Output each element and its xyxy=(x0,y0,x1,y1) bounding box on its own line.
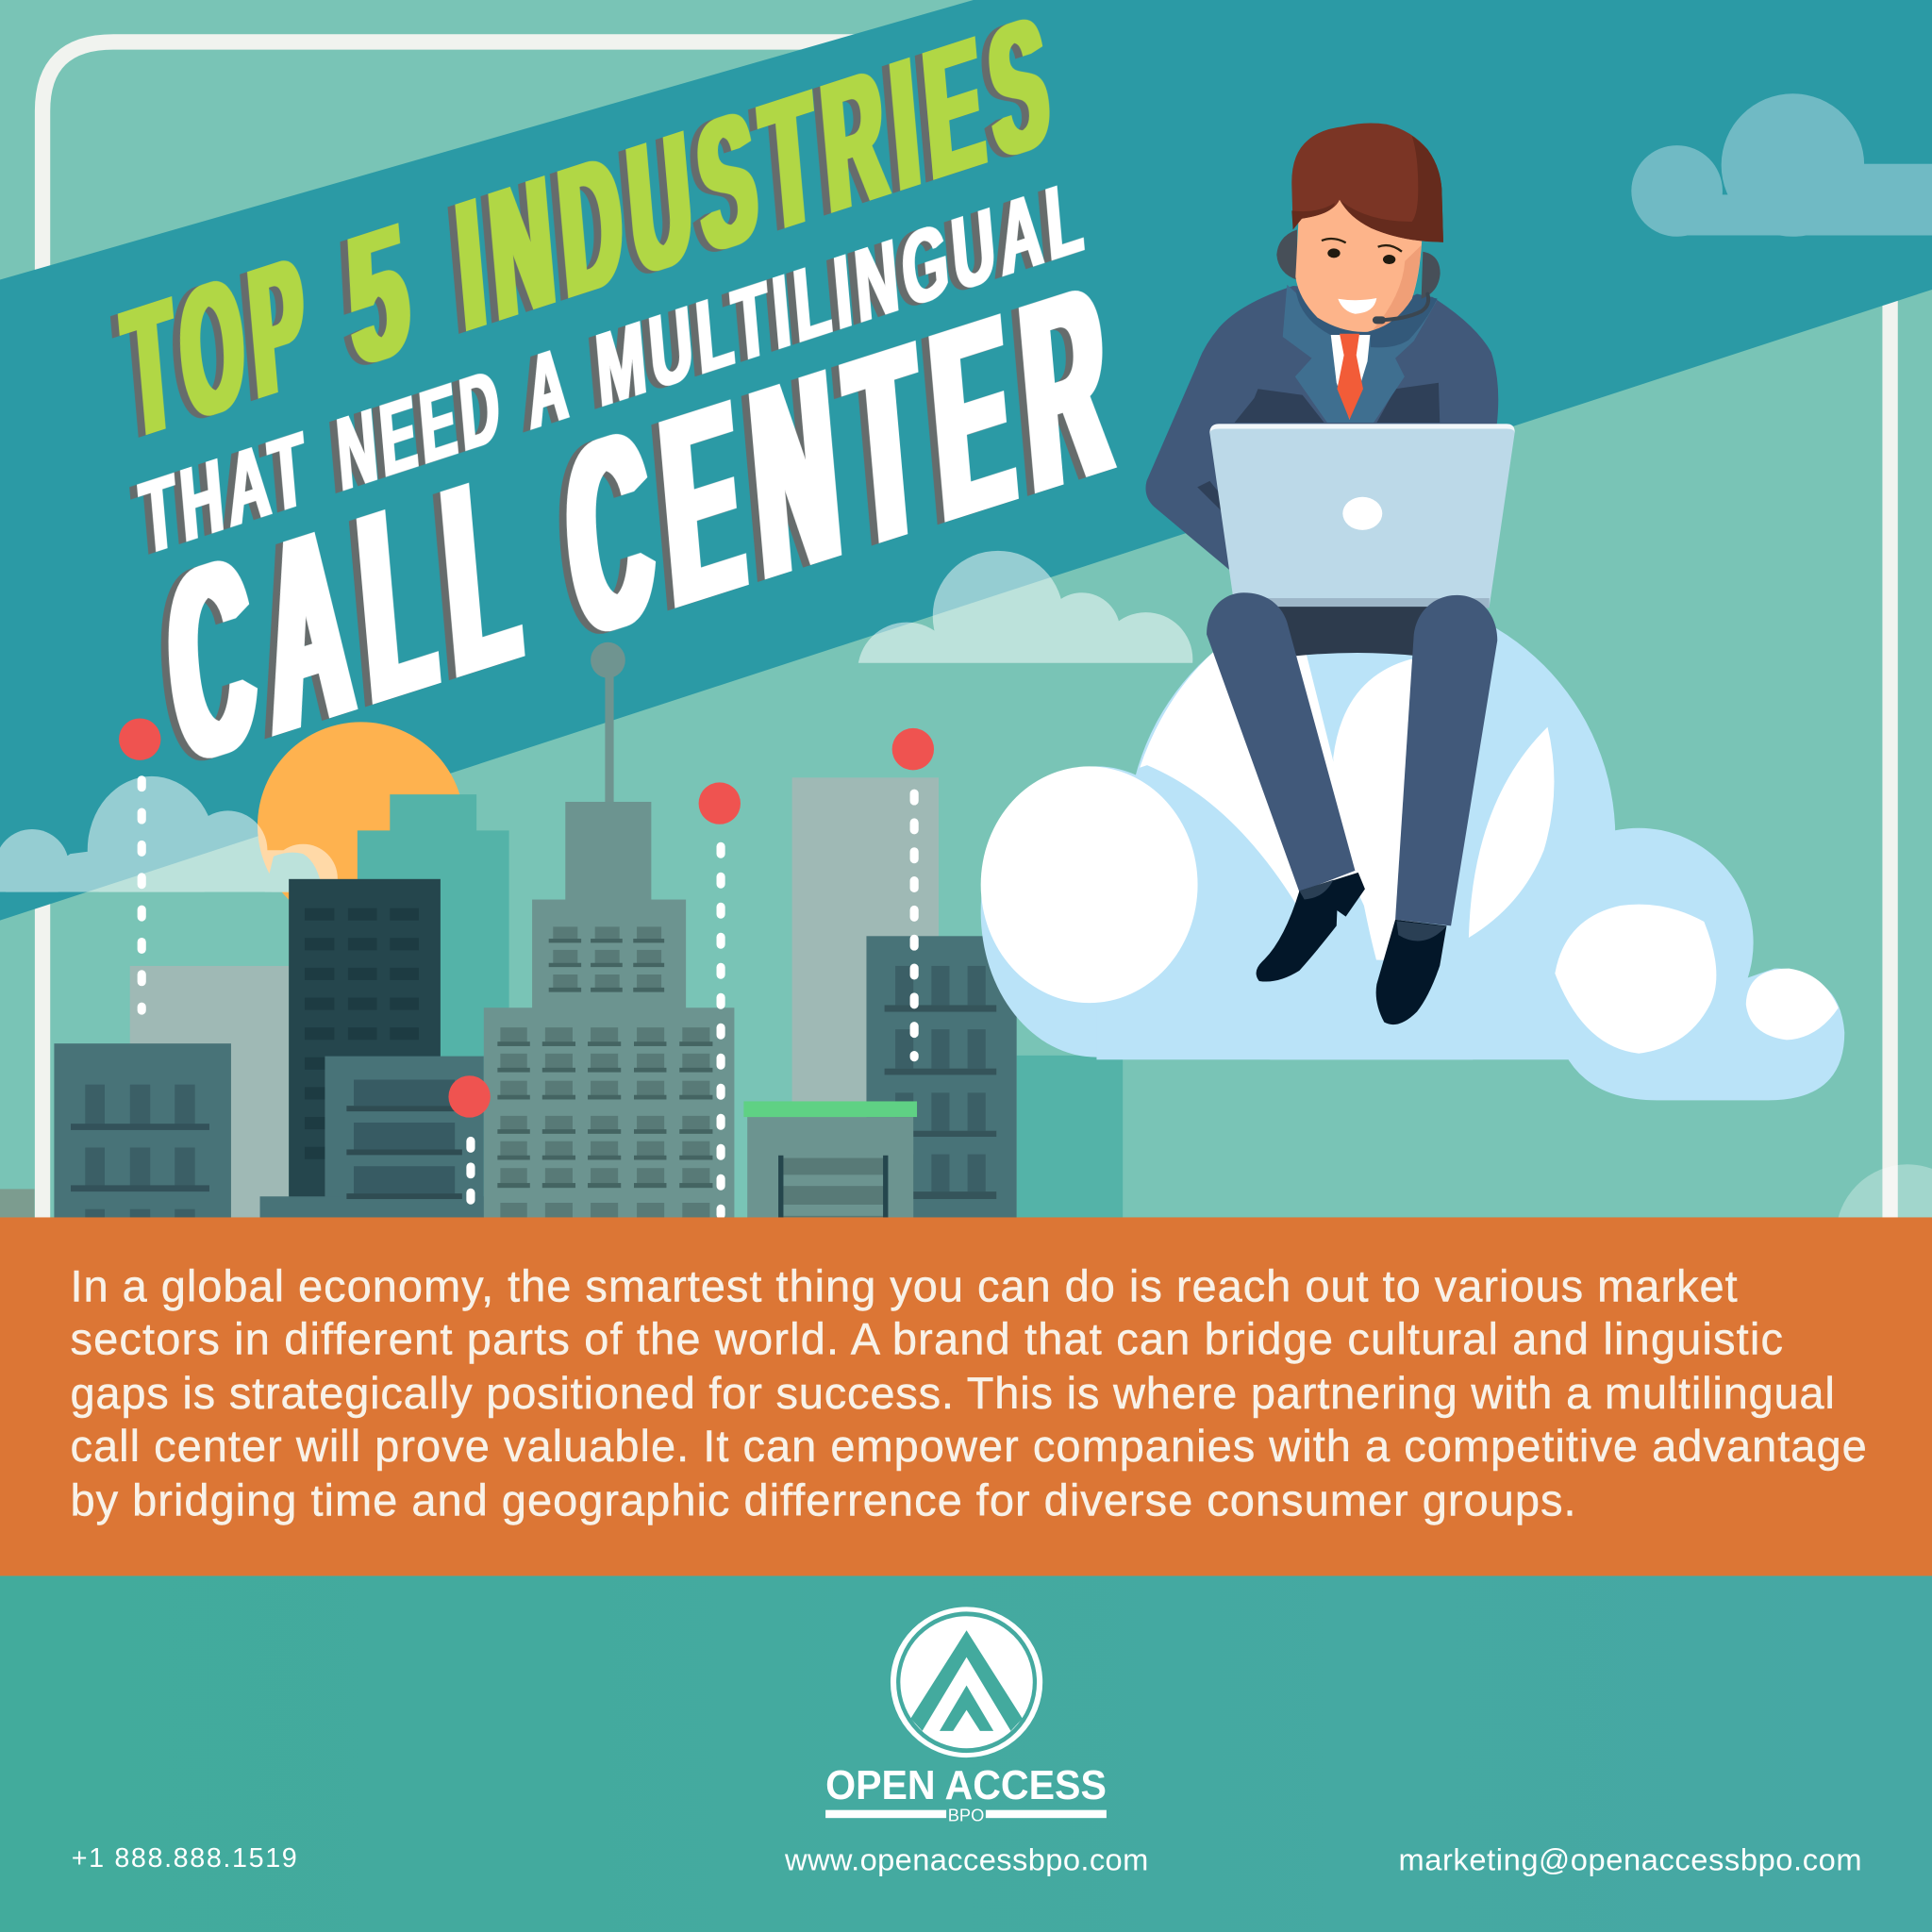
title line 2: A xyxy=(523,325,572,451)
red pin dots xyxy=(119,718,934,1118)
shirt xyxy=(1330,330,1371,420)
back grey building right xyxy=(792,777,939,1106)
cloud: middle xyxy=(858,551,1192,663)
title line 2 shadow: THAT xyxy=(128,410,308,579)
sun xyxy=(258,722,464,929)
low building with green roof xyxy=(743,1101,917,1220)
intro text: gaps is strategically positioned for success. This is where partnering with a multilingual xyxy=(70,1368,1835,1418)
white rounded frame xyxy=(42,42,1890,1217)
right building xyxy=(866,936,1017,1220)
intro text: by bridging time and geographic differrence for diverse consumer groups. xyxy=(70,1475,1576,1525)
title line 2 shadow xyxy=(128,158,1084,579)
infographic canvas: CENTER xyxy=(558,221,1135,695)
cloud: lower right corner xyxy=(1838,1164,1932,1217)
cloud body xyxy=(981,594,1844,1100)
title line 1 shadow: 5 xyxy=(334,186,408,408)
small front building xyxy=(260,1057,484,1217)
left leg xyxy=(1207,592,1355,892)
logo wordmark: OPEN ACCESS xyxy=(825,1762,1107,1808)
phone: +1 888.888.1519 xyxy=(72,1843,297,1874)
sky background xyxy=(0,0,1932,1217)
title xyxy=(110,0,1135,824)
title line 2 shadow: A xyxy=(515,327,564,454)
lapels xyxy=(1283,285,1438,423)
big cloud xyxy=(981,594,1844,1100)
cloud: left xyxy=(0,775,338,892)
city skyline xyxy=(54,642,1123,1220)
panel: footer xyxy=(0,1576,1932,1932)
intro text xyxy=(70,1260,1867,1525)
title line 3 shadow: CALL xyxy=(152,411,537,824)
intro text: In a global economy, the smartest thing you can do is reach out to various market xyxy=(70,1260,1738,1310)
left shoe xyxy=(1257,873,1365,982)
right leg xyxy=(1395,595,1497,925)
cloud: top right xyxy=(1631,93,1932,237)
laptop and legs xyxy=(1207,424,1515,1024)
left sock xyxy=(1299,880,1333,899)
collar shadow xyxy=(1295,290,1438,347)
logo wordmark: BPO xyxy=(948,1805,984,1824)
front left building xyxy=(54,1043,231,1219)
infographic canvas: CENTER xyxy=(550,224,1127,698)
seat shadow xyxy=(1274,607,1432,656)
logo mark xyxy=(893,1609,1040,1756)
cloud highlights xyxy=(981,651,1839,1054)
hair xyxy=(1291,123,1443,242)
title line 1 shadow: TOP xyxy=(110,216,314,479)
email: marketing@openaccessbpo.com xyxy=(1398,1842,1862,1877)
microphone xyxy=(1376,294,1428,320)
ear pads xyxy=(1276,229,1441,299)
title line 1 shadow xyxy=(110,0,1058,479)
title line 2 shadow: MULTILINGUAL xyxy=(585,158,1084,431)
diagonal title band xyxy=(0,0,1932,921)
back grey building left xyxy=(130,966,289,1220)
face shade xyxy=(1373,245,1422,330)
dotted lines xyxy=(142,780,914,1215)
person with laptop and headset xyxy=(1145,123,1515,1024)
ground patch xyxy=(0,1189,35,1217)
title line 2 xyxy=(136,156,1091,576)
map pins with dotted lines xyxy=(119,718,934,1215)
right sock xyxy=(1396,921,1446,941)
title line 2: MULTILINGUAL xyxy=(591,156,1091,428)
title line 2 shadow: NEED xyxy=(325,348,501,515)
right shoe xyxy=(1376,920,1446,1024)
back teal block right xyxy=(1017,1056,1123,1220)
head and headset xyxy=(1276,123,1443,332)
title line 3: CALL xyxy=(159,408,544,823)
dark tower xyxy=(289,879,441,1219)
face xyxy=(1295,198,1422,332)
back teal stepped building xyxy=(357,794,509,1057)
laptop xyxy=(1209,424,1515,608)
title line 2: THAT xyxy=(136,408,315,576)
central skyscraper with antenna xyxy=(484,642,734,1219)
jacket and shirt xyxy=(1145,285,1498,570)
title line 2: NEED xyxy=(333,345,508,512)
tie xyxy=(1337,334,1363,420)
jacket xyxy=(1145,286,1498,570)
hair shade xyxy=(1291,136,1443,242)
title line 1: TOP xyxy=(118,214,322,477)
jacket pockets xyxy=(1197,383,1440,511)
intro text: call center will prove valuable. It can empower companies with a competitive advantage xyxy=(70,1421,1867,1471)
brows and eyes xyxy=(1322,239,1402,264)
panel: intro paragraph xyxy=(0,1217,1932,1576)
title line 1: 5 xyxy=(341,184,415,405)
website: www.openaccessbpo.com xyxy=(784,1842,1148,1877)
left cloud inner lobe xyxy=(265,853,323,892)
intro text: sectors in different parts of the world. A brand that can bridge cultural and linguistic xyxy=(70,1313,1783,1363)
title line 1 xyxy=(118,0,1065,477)
smile xyxy=(1338,298,1376,314)
